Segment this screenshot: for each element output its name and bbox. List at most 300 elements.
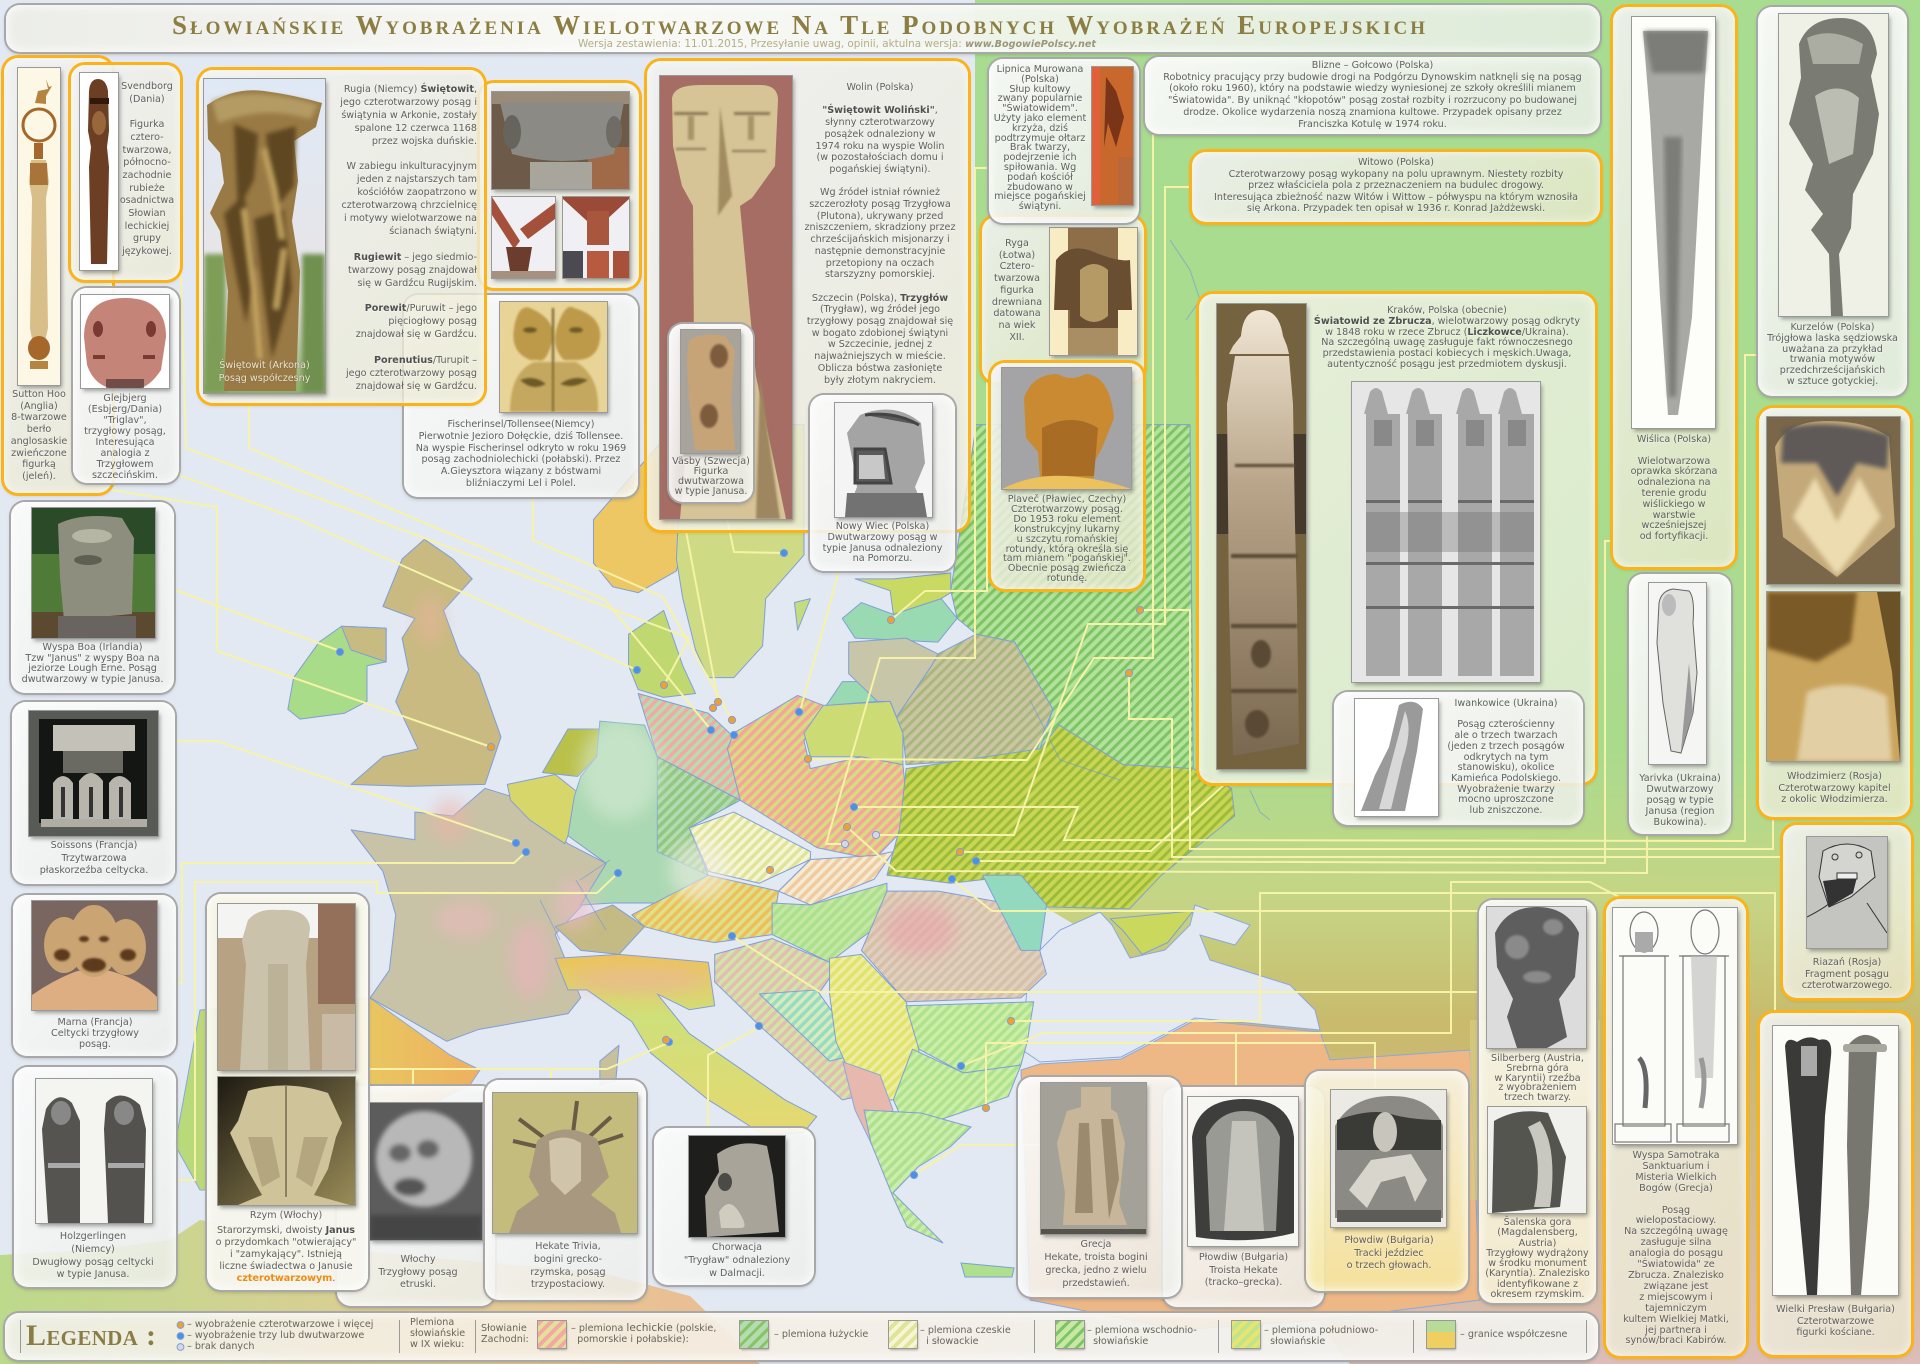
caption: na wiek bbox=[998, 320, 1035, 331]
text: się w Gardźcu Rugijskim. bbox=[358, 278, 477, 289]
caption bbox=[1778, 771, 1891, 805]
caption: jeziorze Lough Erne. Posąg bbox=[28, 663, 157, 674]
caption: przedstawień. bbox=[1062, 1278, 1130, 1289]
image: pillar drawing bbox=[1355, 699, 1438, 816]
caption: typie Janusa odnaleziony bbox=[823, 543, 942, 554]
text: "Światowida". By uniknąć "kłopotów" posąg został rozbity i rozrzucony po budowanej bbox=[1168, 95, 1577, 106]
caption: Starorzymski, dwoisty Janus bbox=[217, 1225, 355, 1236]
caption: Cztero- bbox=[1000, 261, 1034, 272]
caption: o przydomkach "otwierający" bbox=[216, 1237, 356, 1248]
text bbox=[1163, 60, 1582, 130]
caption: (Niemcy) bbox=[71, 1244, 115, 1255]
caption: Šalenska gora bbox=[1504, 1217, 1571, 1228]
text: w Szczecinie, jednej z bbox=[828, 339, 932, 350]
legend: western Slavs label: Słowianie bbox=[481, 1323, 527, 1334]
panel: Płowdiw rider bbox=[1306, 1071, 1468, 1291]
caption: Wielki Presław (Bułgaria) bbox=[1776, 1304, 1895, 1315]
caption: datowana bbox=[993, 308, 1041, 319]
image: figurine bbox=[80, 73, 118, 270]
caption: językowej. bbox=[122, 246, 172, 257]
caption: Trzygłowy posąg bbox=[378, 1267, 458, 1278]
caption: i "zamykający". Istnieją bbox=[230, 1249, 342, 1260]
caption: Rzym (Włochy) bbox=[250, 1210, 322, 1221]
caption bbox=[1631, 434, 1717, 542]
caption: Płowdiw (Bułgaria) bbox=[1344, 1235, 1434, 1246]
text: jego czterotwarzowy posąg i bbox=[340, 97, 477, 108]
caption: Pierwotnie Jezioro Dołęckie, dziś Tollensee. bbox=[419, 431, 623, 442]
image: relief bbox=[29, 711, 158, 836]
caption: Lipnica Murowana bbox=[997, 64, 1083, 75]
caption: terenie grodu bbox=[1642, 488, 1706, 499]
image: figurine bbox=[681, 330, 740, 453]
caption: Do 1953 roku element bbox=[1013, 514, 1121, 525]
caption: dwutwarzowy w typie Janusa. bbox=[22, 674, 163, 685]
caption: Austria) bbox=[1519, 1238, 1556, 1249]
text: Wolin (Polska) bbox=[846, 82, 913, 93]
caption bbox=[530, 1241, 606, 1290]
text: i motywy wielotwarzowe na bbox=[344, 213, 477, 224]
caption bbox=[22, 642, 163, 685]
caption: Posąg bbox=[1662, 1205, 1690, 1216]
caption: płaskorzeźba celtycka. bbox=[40, 865, 148, 876]
caption: rzymska, posąg bbox=[530, 1267, 606, 1278]
caption: odnaleziona na bbox=[1637, 477, 1711, 488]
text: autentyczność posągu jest przedmiotem dyskusji. bbox=[1327, 359, 1567, 370]
swatch: South Slavic bbox=[1232, 1321, 1260, 1348]
caption: trwania motywów bbox=[1790, 354, 1875, 365]
caption bbox=[1491, 1053, 1584, 1103]
image: carved wood statue bbox=[204, 79, 325, 393]
text: pogańskiej świątyni). bbox=[829, 164, 931, 175]
caption: Hekate Trivia, bbox=[535, 1241, 601, 1252]
caption: dwutwarzowa bbox=[678, 476, 744, 487]
caption: Zbrucza. Znalezisko bbox=[1628, 1270, 1724, 1281]
caption: Trzytwarzowa bbox=[61, 852, 127, 864]
caption: Fragment posągu bbox=[1805, 968, 1889, 980]
caption bbox=[216, 1210, 356, 1284]
text: Szczecin (Polska), Trzygłów bbox=[812, 293, 948, 304]
image: idol drawing, four sides bbox=[1352, 382, 1540, 682]
caption: posąg zachodniolechicki (połabski). Przez bbox=[422, 454, 620, 465]
panel: Silberberg and Stalenska gora bbox=[1479, 900, 1596, 1303]
legend: tribes label: Plemiona bbox=[410, 1317, 454, 1328]
caption: Dwutwarzowy bbox=[1646, 784, 1714, 795]
text: najważniejszych w mieście. bbox=[814, 351, 946, 362]
caption bbox=[1639, 773, 1721, 828]
text: jeden z najstarszych tam bbox=[357, 174, 477, 185]
legend heading: Legenda : bbox=[26, 1319, 156, 1352]
caption: Włochy bbox=[400, 1254, 436, 1265]
panel: Ryga bbox=[982, 217, 1144, 382]
text: pięciogłowy posąg bbox=[388, 316, 477, 327]
legend: marker key: – wyobrażenie czterotwarzowe i więcej bbox=[187, 1319, 373, 1330]
text: (jeden z trzech posągów bbox=[1447, 741, 1565, 752]
panel: Wielki Presław bbox=[1760, 1013, 1911, 1355]
text: w bogato zdobionej świątyni bbox=[812, 328, 948, 339]
caption: synów/braci Kabirów. bbox=[1626, 1335, 1726, 1346]
caption bbox=[40, 840, 148, 876]
image: Celtic tricephalic bbox=[32, 901, 157, 1010]
panel: Witowo bbox=[1192, 152, 1600, 222]
image: leather sheath bbox=[1632, 17, 1715, 428]
text: mocno uproszczone bbox=[1458, 794, 1554, 805]
caption: zasługuje silna bbox=[1641, 1237, 1711, 1248]
caption: Czterotwarzowy kapitel bbox=[1778, 782, 1891, 794]
caption: warstwie bbox=[1653, 510, 1695, 521]
title banner bbox=[6, 5, 1600, 52]
image: Hecate bust bbox=[493, 1093, 637, 1233]
image: Janus of Boa bbox=[32, 508, 155, 638]
caption: przedchrześcijańskich bbox=[1780, 365, 1885, 376]
panel: Marna bbox=[13, 895, 176, 1056]
caption: Figurka bbox=[694, 466, 728, 477]
image: carved stone bbox=[1487, 907, 1586, 1048]
legend text: South Slavic: – plemiona południowo- bbox=[1264, 1325, 1378, 1336]
text: Rugia (Niemcy) Świętowit, bbox=[344, 84, 477, 95]
image: fragment drawing bbox=[1807, 837, 1887, 948]
caption: Obecnie posąg zwieńcza bbox=[1008, 563, 1126, 574]
legend text: East Slavic: słowiańskie bbox=[1093, 1336, 1148, 1347]
caption: Figurka bbox=[130, 119, 164, 130]
text: szczerozłoty posąg Trzygłowa bbox=[809, 199, 951, 210]
caption: Soissons (Francja) bbox=[51, 840, 137, 851]
caption: Misteria Wielkich bbox=[1635, 1172, 1717, 1183]
legend text: Czech and Slovak: i słowackie bbox=[926, 1336, 979, 1347]
caption: Płowdiw (Bułgaria) bbox=[1199, 1252, 1288, 1263]
caption: Srebrna góra bbox=[1506, 1063, 1569, 1074]
caption: oprawka skórzana bbox=[1631, 466, 1717, 477]
legend text: Czech and Slovak bbox=[920, 1325, 1011, 1347]
caption: twarzowa, bbox=[122, 145, 172, 156]
text: trzygłowy posąg znajdował się bbox=[807, 316, 953, 327]
text: Wyobrażenie twarzy bbox=[1457, 784, 1555, 795]
legend: marker key: – brak danych bbox=[187, 1341, 254, 1352]
caption: figurka bbox=[1000, 285, 1034, 296]
caption: Wyspa Samotraka bbox=[1632, 1150, 1720, 1161]
caption: czterotwarzowego. bbox=[1802, 980, 1892, 991]
caption: tam mianem "pogańskiej". bbox=[1003, 553, 1131, 564]
caption: jej partnera i bbox=[1645, 1324, 1707, 1336]
caption: Tzw "Janus" z wyspy Boa na bbox=[25, 653, 160, 664]
swatch: East Slavic bbox=[1056, 1321, 1084, 1348]
text bbox=[1447, 698, 1565, 816]
text: spalone 12 czerwca 1168 bbox=[355, 123, 477, 134]
caption: identyfikowane z bbox=[1497, 1279, 1578, 1290]
image: sceptre bbox=[18, 68, 60, 385]
caption: Väsby (Szwecja) bbox=[672, 456, 750, 467]
legend: tribes label bbox=[410, 1317, 465, 1350]
caption: Nowy Wiec (Polska) bbox=[836, 521, 929, 532]
text: Franciszka Kotulę w 1974 roku. bbox=[1298, 119, 1447, 130]
text: (Trygław), wg źródeł jego bbox=[820, 304, 940, 315]
text: (Plutona), ukrywany przed bbox=[817, 211, 943, 222]
caption bbox=[992, 238, 1042, 343]
caption bbox=[120, 81, 174, 257]
swatch: Lusatian bbox=[740, 1321, 768, 1348]
caption: Sutton Hoo bbox=[12, 389, 66, 400]
caption: Bogów (Grecja) bbox=[1639, 1183, 1713, 1194]
text: się Arkona. Przypadek ten opisał w 1936 r. Konrad Jażdżewski. bbox=[1247, 203, 1545, 214]
text: drodze. Okolice wydarzenia noszą znamiona kultowe. Przypadek opisany przez bbox=[1183, 107, 1562, 118]
caption bbox=[378, 1254, 458, 1290]
text: ale o trzech twarzach bbox=[1454, 730, 1558, 741]
caption: Chorwacja bbox=[712, 1242, 762, 1253]
caption: na Pomorzu. bbox=[853, 553, 912, 564]
legend: western Slavs label bbox=[481, 1323, 529, 1345]
caption: zwany popularnie bbox=[998, 93, 1082, 104]
image: four-faced figure bbox=[660, 76, 792, 519]
caption: A.Gieysztora wiązany z bóstwami bbox=[441, 466, 601, 477]
caption bbox=[416, 419, 626, 489]
panel: Samotraka bbox=[1606, 899, 1746, 1356]
caption: Na szczególną uwagę bbox=[1624, 1226, 1728, 1237]
panel: Kraków Zbruch idol bbox=[1199, 294, 1595, 783]
text: kościółów zaopatrzono w bbox=[357, 187, 477, 198]
caption bbox=[1767, 322, 1898, 387]
panel: Fischerinsel bbox=[404, 295, 638, 497]
image: wooden figure bbox=[1050, 228, 1137, 355]
caption: (tracko–grecka). bbox=[1205, 1277, 1282, 1288]
text: 1974 roku na wyspie Wolin bbox=[816, 141, 944, 152]
caption bbox=[1802, 957, 1892, 991]
caption: szczecińskim. bbox=[92, 470, 158, 481]
caption: zwieńczone bbox=[11, 448, 67, 459]
swatch: Lechitic bbox=[538, 1321, 566, 1348]
panel: Svendborg bbox=[71, 65, 180, 280]
caption: Dwugłowy posąg celtycki bbox=[32, 1257, 154, 1268]
caption: Włodzimierz (Rosja) bbox=[1787, 771, 1882, 782]
caption: Troista Hekate bbox=[1209, 1265, 1278, 1276]
image: twin heads bbox=[500, 302, 607, 412]
caption: w środku monument bbox=[1488, 1258, 1587, 1269]
caption: twarzowa bbox=[994, 273, 1040, 284]
text: świątynia w Arkonie, zostały bbox=[341, 110, 477, 121]
caption: grecka, jedno z wielu bbox=[1045, 1265, 1147, 1276]
image: orange stone head bbox=[1002, 368, 1131, 489]
caption: XII. bbox=[1009, 332, 1025, 343]
caption: w sztuce gotyckiej. bbox=[1787, 376, 1878, 387]
panel: Glejbjerg bbox=[73, 288, 179, 483]
caption: lechickiej bbox=[125, 221, 169, 232]
caption: z wyobrażeniem bbox=[1498, 1082, 1577, 1093]
caption: Celtycki trzygłowy bbox=[51, 1028, 139, 1039]
caption: Użyty jako element bbox=[994, 113, 1086, 124]
caption: Słowian bbox=[128, 208, 166, 219]
panel: Blizne bbox=[1145, 57, 1600, 134]
image: font bbox=[492, 92, 629, 189]
image: Triglav Dalmatia bbox=[689, 1136, 785, 1237]
text: starszyzny pomorskiej. bbox=[825, 269, 935, 280]
text: przez wojska duńskie. bbox=[372, 136, 477, 147]
text bbox=[1314, 305, 1580, 370]
image: capital, view 1 bbox=[1767, 417, 1900, 584]
caption: Trzygłowem bbox=[97, 459, 153, 470]
text: Posąg czterościenny bbox=[1457, 719, 1555, 730]
caption: etruski. bbox=[400, 1279, 436, 1290]
text bbox=[1214, 157, 1578, 214]
legend text: East Slavic bbox=[1087, 1325, 1197, 1347]
caption: krzyża, dziś bbox=[1012, 123, 1068, 134]
caption: podań kościół bbox=[1007, 172, 1073, 183]
caption: drewniana bbox=[992, 297, 1042, 308]
caption: (Łotwa) bbox=[999, 250, 1035, 261]
text: posążek odnaleziony w bbox=[824, 129, 936, 140]
legend text: Lusatian: – plemiona łużyckie bbox=[774, 1329, 868, 1340]
panel: Iwankowice bbox=[1334, 692, 1583, 825]
image: corbel face left bbox=[492, 197, 555, 278]
caption: Glejbjerg bbox=[103, 393, 147, 404]
panel: Włochy bbox=[337, 1086, 495, 1306]
text: Blizne – Gołcowo (Polska) bbox=[1312, 60, 1433, 71]
image: statue drawing bbox=[1649, 583, 1706, 764]
caption bbox=[822, 521, 942, 564]
caption bbox=[1199, 1252, 1288, 1288]
caption: o trzech głowach. bbox=[1347, 1260, 1431, 1271]
caption: cztero- bbox=[130, 132, 164, 143]
text bbox=[340, 82, 477, 392]
caption bbox=[684, 1242, 790, 1279]
caption: figurką bbox=[22, 459, 56, 470]
caption: miejsce pogańskiej bbox=[994, 191, 1086, 202]
caption: Wiślica (Polska) bbox=[1637, 434, 1711, 445]
caption: Kurzelów (Polska) bbox=[1791, 322, 1874, 333]
text: były złotym nakryciem. bbox=[824, 375, 936, 386]
panel: Riazań bbox=[1783, 825, 1911, 998]
caption bbox=[1623, 1150, 1729, 1346]
caption: świątyni. bbox=[1019, 201, 1061, 212]
text: zniszczeniem, skradziony przez bbox=[804, 222, 955, 233]
text: Rugiewit – jego siedmio- bbox=[354, 252, 477, 263]
caption: trzygłowy posąg, bbox=[84, 426, 166, 437]
caption: Tracki jeździec bbox=[1354, 1248, 1424, 1259]
image: triple Hecate bbox=[1041, 1083, 1146, 1234]
caption: liczne świadectwa o Janusie bbox=[219, 1261, 353, 1272]
caption bbox=[84, 393, 166, 481]
image: two-sided statue bbox=[36, 1079, 152, 1223]
legend text: South Slavic: słowiańskie bbox=[1270, 1336, 1325, 1347]
caption: rubieże bbox=[129, 183, 165, 194]
legend bbox=[5, 1313, 1598, 1360]
caption: (Anglia) bbox=[20, 401, 58, 412]
caption: Silberberg (Austria, bbox=[1491, 1053, 1584, 1064]
image: capital, view 2 bbox=[1767, 592, 1900, 761]
caption: rotundy, którą określa się bbox=[1006, 544, 1128, 555]
caption: Yarivka (Ukraina) bbox=[1639, 773, 1721, 784]
panel: Lipnica Murowana bbox=[989, 59, 1139, 223]
image: bone figurines bbox=[1773, 1026, 1898, 1295]
image: monument bbox=[1488, 1107, 1586, 1213]
panel: Kurzelów bbox=[1758, 7, 1907, 396]
text: Witowo (Polska) bbox=[1358, 157, 1434, 168]
caption: Słup kultowy bbox=[1009, 84, 1071, 95]
text: "Świętowit Woliński", bbox=[822, 105, 938, 116]
caption: "Trygław" odnaleziony bbox=[684, 1255, 790, 1266]
photo caption: Posąg współczesny bbox=[219, 373, 310, 384]
text: Kraków, Polska (obecnie) bbox=[1387, 305, 1507, 316]
text: twarzowy posąg znajdował bbox=[348, 265, 477, 276]
caption bbox=[1344, 1235, 1434, 1272]
caption: Sanktuarium i bbox=[1642, 1161, 1710, 1172]
caption: (Polska) bbox=[1021, 74, 1059, 85]
panel: Holzgerlingen bbox=[14, 1067, 176, 1287]
panel: Nowy Wiec bbox=[810, 395, 955, 571]
legend text: Lechitic: – plemiona lechickie (polskie, bbox=[571, 1322, 716, 1334]
text: Oblicza bóstwa zasłonięte bbox=[818, 363, 942, 374]
caption: Janusa (region bbox=[1646, 806, 1714, 817]
caption bbox=[672, 456, 750, 497]
caption: Czterotwarzowe bbox=[1797, 1316, 1874, 1326]
text: Wg źródeł istniał również bbox=[820, 187, 940, 198]
caption bbox=[11, 389, 67, 482]
legend text: Czech and Slovak: – plemiona czeskie bbox=[920, 1325, 1011, 1336]
text: czterotwarzową chrzcielnicę bbox=[342, 200, 477, 211]
caption: w Dalmacji. bbox=[709, 1268, 765, 1279]
panel: Grecja bbox=[1018, 1077, 1181, 1297]
caption: posąg w typie bbox=[1646, 795, 1713, 806]
caption: Holzgerlingen bbox=[60, 1231, 126, 1242]
caption: Na wyspie Fischerinsel odkryto w roku 1969 bbox=[416, 443, 626, 454]
panel: Wolin bbox=[647, 61, 968, 530]
text: Porenutius/Turupit – bbox=[374, 355, 477, 366]
text: W zabiegu inkulturacyjnym bbox=[347, 161, 477, 172]
caption: grupy bbox=[133, 233, 161, 244]
caption: Brak twarzy, bbox=[1010, 142, 1070, 153]
panel: baptismal font photos bbox=[480, 83, 639, 288]
caption: zachodnie bbox=[123, 170, 171, 181]
image: herm drawings bbox=[1613, 908, 1737, 1144]
caption: wielopostaciowy. bbox=[1636, 1215, 1716, 1226]
caption: Dwutwarzowy posąg w bbox=[827, 532, 938, 543]
text: (w pozostałościach domu i bbox=[816, 152, 944, 163]
image: corbel face right bbox=[563, 197, 629, 278]
text: stanowisku), okolice bbox=[1458, 762, 1554, 773]
image: Zbruch idol photo bbox=[1217, 304, 1306, 769]
caption bbox=[1044, 1239, 1148, 1289]
legend: tribes label: w IX wieku: bbox=[410, 1339, 464, 1350]
caption: uważana za przykład bbox=[1782, 344, 1883, 355]
image: two-faced statue bbox=[835, 403, 932, 517]
caption: analogia do posągu bbox=[1629, 1248, 1723, 1259]
text: przez właściciela pola z przeznaczeniem na budulec drogowy. bbox=[1248, 180, 1544, 191]
caption: związane jest bbox=[1644, 1281, 1708, 1292]
caption: analogia z bbox=[100, 448, 150, 459]
text: lub zniszczone. bbox=[1470, 805, 1542, 816]
caption: od fortyfikacji. bbox=[1640, 531, 1708, 542]
legend text: Lechitic bbox=[571, 1323, 716, 1345]
text: Światowid ze Zbrucza, wielotwarzowy posąg odkryty bbox=[1314, 316, 1580, 327]
caption: zbudowano w bbox=[1007, 182, 1073, 193]
caption: północno- bbox=[123, 157, 171, 168]
caption: w Karyntii) rzeźba bbox=[1494, 1073, 1581, 1084]
caption: Trzygłowy wydrążony bbox=[1486, 1248, 1589, 1259]
legend text: South Slavic bbox=[1264, 1325, 1378, 1347]
caption: Marna (Francja) bbox=[58, 1017, 132, 1028]
caption: trzech twarzy. bbox=[1504, 1092, 1571, 1103]
text: przetopiony na oczach bbox=[826, 258, 934, 269]
caption: z okolic Włodzimierza. bbox=[1781, 794, 1888, 805]
text: (około roku 1960), który na podstawie wiedzy wyniesionej ze szkoły określili mianem bbox=[1169, 83, 1576, 94]
caption: czterotwarzowym. bbox=[237, 1273, 335, 1284]
caption: (Esbjerg/Dania) bbox=[88, 404, 162, 415]
caption: Riazań (Rosja) bbox=[1813, 957, 1881, 968]
panel: Sutton Hoo bbox=[4, 58, 112, 493]
caption: figurki kościane. bbox=[1796, 1327, 1875, 1338]
caption: Ryga bbox=[1005, 238, 1029, 249]
image: Etruscan statue bbox=[370, 1103, 482, 1240]
image: Janus head bbox=[218, 1077, 355, 1205]
text: przedstawienia postaci kobiecych i męskich.Uwaga, bbox=[1323, 348, 1571, 359]
caption: bogini grecko- bbox=[534, 1254, 602, 1265]
